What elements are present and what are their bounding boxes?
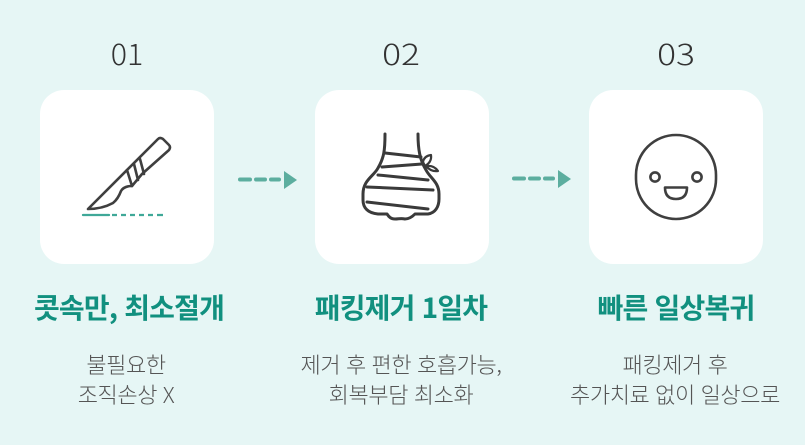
step number 01: 01 bbox=[111, 32, 143, 74]
text: step 2 description bbox=[301, 348, 501, 410]
icon: incision line bbox=[83, 214, 163, 216]
panel: card 3 bbox=[589, 90, 763, 264]
icon: bandaged nose bbox=[363, 134, 439, 219]
step number 03: 03 bbox=[657, 32, 695, 74]
text: step 2 description: 제거 후 편한 호흡가능, bbox=[301, 348, 501, 380]
heading: step 1: 콧속만, 최소절개 bbox=[34, 287, 224, 327]
text: step 1 description: 조직손상 X bbox=[78, 378, 174, 410]
icon: scalpel bbox=[88, 138, 170, 209]
heading: step 2: 패킹제거 1일차 bbox=[315, 287, 487, 327]
panel: card 1 bbox=[40, 90, 214, 264]
text: step 3 description bbox=[570, 348, 780, 410]
text: step 1 description bbox=[78, 348, 174, 410]
icon: smiling face bbox=[636, 135, 716, 219]
text: step 3 description: 추가치료 없이 일상으로 bbox=[570, 378, 780, 410]
heading: step 3: 빠른 일상복귀 bbox=[598, 287, 754, 327]
arrow: step 2 to 3 bbox=[514, 170, 571, 188]
step number 02: 02 bbox=[382, 32, 420, 74]
panel: card 2 bbox=[315, 90, 489, 264]
text: step 2 description: 회복부담 최소화 bbox=[329, 378, 473, 410]
text: step 1 description: 불필요한 bbox=[86, 348, 166, 380]
arrow: step 1 to 2 bbox=[240, 171, 297, 189]
text: step 3 description: 패킹제거 후 bbox=[623, 348, 727, 380]
